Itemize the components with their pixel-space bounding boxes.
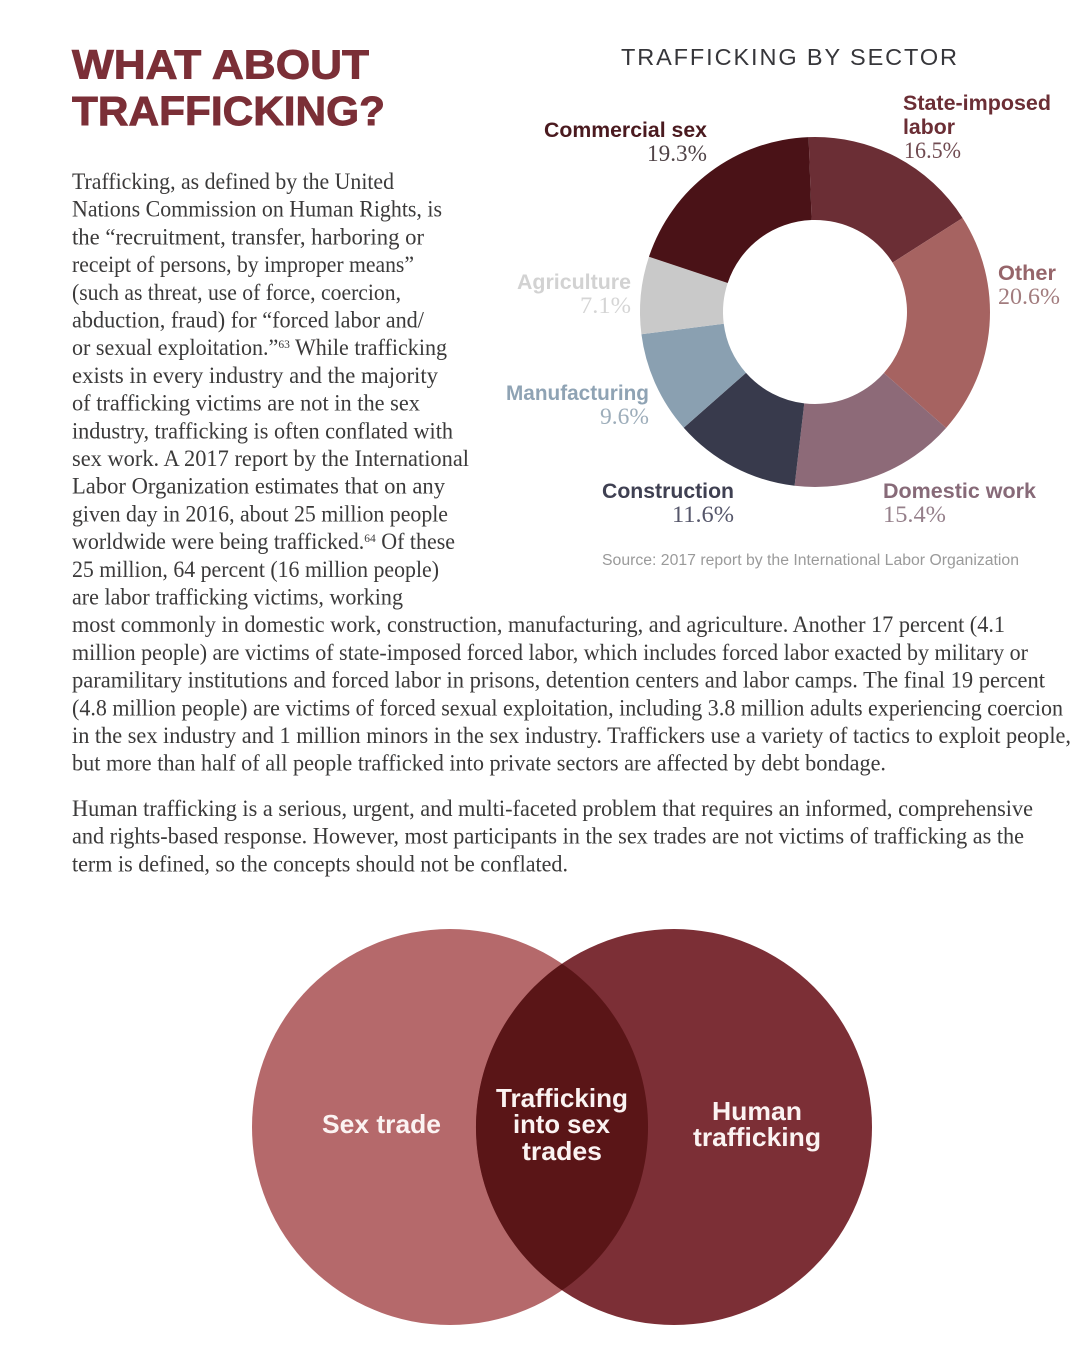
segment: agriculture 7.1%	[640, 257, 728, 334]
text block: wrapped intro paragraph: Of these	[376, 529, 455, 554]
label: trafficking into sex trades: Trafficking	[496, 1083, 628, 1113]
text block: second paragraph: and rights-based response. However, most participants in the sex trades are not victims of trafficking as the	[72, 824, 1024, 849]
label: manufacturing: Manufacturing	[506, 382, 649, 405]
label: domestic work: 15.4%	[883, 502, 946, 527]
label: agriculture: Agriculture	[517, 271, 631, 294]
text block: wrapped intro paragraph: given day in 2016, about 25 million people	[72, 501, 448, 526]
label: human trafficking: Human	[712, 1096, 802, 1126]
label: other: 20.6%	[998, 284, 1060, 309]
text block: full-width continuation of intro paragraph: but more than half of all people trafficked into private sectors are affected by debt bondage.	[72, 751, 886, 776]
text block: wrapped intro paragraph: receipt of persons, by improper means”	[72, 252, 414, 277]
label: state-imposed labor: labor	[903, 116, 955, 139]
text block: wrapped intro paragraph	[72, 169, 469, 610]
text block: second paragraph: term is defined, so the concepts should not be conflated.	[72, 851, 568, 876]
title	[72, 42, 385, 134]
overlap: trafficking into sex trades	[476, 964, 648, 1290]
text block: wrapped intro paragraph: 25 million, 64 percent (16 million people)	[72, 557, 439, 582]
text block: full-width continuation of intro paragraph: paramilitary institutions and forced labor in prisons, detention centers and labor camps. The final 19 percent	[72, 668, 1046, 693]
segment: other 20.6%	[884, 218, 990, 428]
label: commercial sex: 19.3%	[647, 141, 707, 166]
label: trafficking into sex trades: into sex	[513, 1109, 611, 1139]
label: construction: 11.6%	[672, 502, 734, 527]
label: sex trade: Sex trade	[322, 1109, 441, 1139]
label: state-imposed labor	[903, 92, 1051, 163]
text block: wrapped intro paragraph: Labor Organization estimates that on any	[72, 474, 445, 499]
text block: wrapped intro paragraph: the “recruitment, transfer, harboring or	[72, 224, 424, 249]
label: domestic work	[883, 480, 1036, 527]
label: domestic work: Domestic work	[883, 480, 1036, 503]
label: state-imposed labor: State-imposed	[903, 92, 1051, 115]
text block: full-width continuation of intro paragraph: million people) are victims of state-imposed forced labor, which includes forced labor exacted by military or	[72, 640, 1028, 665]
chart heading: TRAFFICKING BY SECTOR	[621, 44, 957, 70]
text block: second paragraph: Human trafficking is a serious, urgent, and multi-faceted problem that requires an informed, comprehensive	[72, 796, 1033, 821]
label: agriculture	[517, 271, 631, 318]
text block: wrapped intro paragraph: exists in every industry and the majority	[72, 363, 438, 388]
label: human trafficking	[693, 1096, 821, 1152]
text block: wrapped intro paragraph: worldwide were being trafficked.	[72, 529, 378, 554]
text block: wrapped intro paragraph: Nations Commission on Human Rights, is	[72, 197, 442, 222]
segment: domestic work 15.4%	[795, 373, 946, 487]
text block: wrapped intro paragraph: abduction, fraud) for “forced labor and/	[72, 308, 425, 332]
text block: wrapped intro paragraph: sex work. A 2017 report by the International	[72, 446, 469, 471]
text block: wrapped intro paragraph: or sexual exploitation.”	[72, 335, 287, 360]
label: agriculture: 7.1%	[580, 293, 631, 318]
label: other	[998, 262, 1060, 309]
label: trafficking into sex trades	[496, 1083, 628, 1166]
text block: wrapped intro paragraph: of trafficking victims are not in the sex	[72, 391, 420, 416]
label: construction: Construction	[602, 480, 734, 503]
label: human trafficking: trafficking	[693, 1122, 821, 1152]
text block: full-width continuation of intro paragraph: (4.8 million people) are victims of forced sexual exploitation, including 3.8 million adults experiencing coercion	[72, 695, 1063, 720]
title: WHAT ABOUT	[72, 42, 369, 88]
label: manufacturing	[506, 382, 649, 429]
title: TRAFFICKING?	[72, 88, 385, 134]
label: other: Other	[998, 262, 1056, 285]
text block: wrapped intro paragraph: While trafficking	[290, 335, 447, 360]
label: construction	[602, 480, 734, 527]
label: commercial sex: Commercial sex	[544, 119, 707, 142]
label: trafficking into sex trades: trades	[522, 1136, 602, 1166]
text block: wrapped intro paragraph: Trafficking, as defined by the United	[72, 169, 394, 194]
text block: wrapped intro paragraph: 63	[278, 337, 290, 351]
segment: construction 11.6%	[684, 373, 804, 486]
text block: full-width continuation of intro paragraph	[72, 612, 1071, 776]
segment: manufacturing 9.6%	[641, 324, 746, 428]
text block: full-width continuation of intro paragraph: in the sex industry and 1 million minors in the sex industry. Traffickers use a variety of tactics to exploit people,	[72, 723, 1071, 748]
segment: commercial sex 19.3%	[649, 137, 812, 283]
text block: wrapped intro paragraph: (such as threat, use of force, coercion,	[72, 280, 401, 305]
circle: sex trade	[252, 929, 648, 1325]
text block: second paragraph	[72, 796, 1033, 876]
text block: wrapped intro paragraph: are labor trafficking victims, working	[72, 584, 403, 610]
circle: human trafficking	[476, 929, 872, 1325]
text block: full-width continuation of intro paragraph: most commonly in domestic work, construction, manufacturing, and agriculture. Another 17 percent (4.1	[72, 612, 1005, 637]
donut chart: trafficking by sector	[640, 137, 990, 487]
text block: wrapped intro paragraph: 64	[364, 531, 376, 545]
text block: wrapped intro paragraph: industry, trafficking is often conflated with	[72, 418, 453, 443]
label: manufacturing: 9.6%	[600, 404, 649, 429]
label: state-imposed labor: 16.5%	[904, 138, 961, 163]
label: commercial sex	[544, 119, 707, 166]
venn diagram	[252, 929, 872, 1325]
segment: state-imposed labor 16.5%	[809, 137, 963, 263]
source note: Source: 2017 report by the International Labor Organization	[602, 552, 1019, 569]
